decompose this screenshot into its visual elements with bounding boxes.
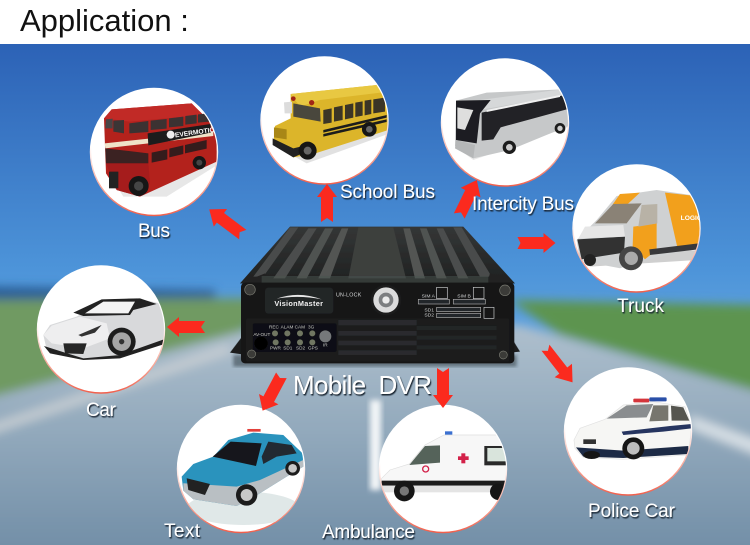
indicator panel: IR: [323, 343, 328, 348]
panel: Car: [38, 266, 167, 393]
un-lock label: UN-LOCK: [336, 293, 362, 299]
logo plate: [265, 288, 333, 314]
SIM and SD slots: [418, 287, 494, 319]
label: Police Car: Police Car: [588, 501, 676, 522]
arrow: to Police Car: [537, 341, 581, 389]
icon: blue taxi: [182, 429, 303, 525]
icon: red double-decker bus: EVERMOTION: [175, 126, 220, 139]
indicator panel: 3G: [308, 325, 315, 330]
arrow: to Text taxi: [253, 370, 291, 416]
indicator panel: PWR: [270, 345, 281, 350]
header band: [0, 0, 750, 44]
indicator panel: SD2: [296, 345, 305, 350]
lower vent panel: [246, 318, 509, 362]
icon: white ambulance van: [382, 431, 508, 501]
title: Application :: [20, 3, 189, 38]
mounting flanges: [230, 335, 250, 355]
icon: yellow school bus: [273, 85, 390, 163]
label: Bus: Bus: [138, 221, 170, 242]
label: Ambulance: Ambulance: [322, 522, 415, 543]
front face: [241, 283, 514, 363]
icon: white sports car: [43, 298, 167, 360]
indicator panel: REC: [269, 325, 279, 330]
panel: Bus: [90, 88, 220, 216]
corner screws: [245, 284, 510, 359]
SIM and SD slots: SD2: [424, 313, 434, 319]
arrow: to Truck: [518, 233, 556, 253]
panel: Ambulance: [380, 406, 508, 532]
arrow: to Bus: [203, 201, 249, 243]
arrow: to Ambulance: [433, 368, 453, 408]
logo plate: VisionMaster: [274, 299, 323, 308]
panel: Truck: [573, 165, 702, 292]
indicator panel: [253, 323, 337, 352]
icon: silver coach: [455, 89, 570, 160]
indicator panel: ALAM: [281, 325, 293, 330]
icon: orange delivery van: LOGIC: [681, 215, 702, 222]
panel: School Bus: [261, 57, 390, 184]
label: Mobile DVR: Mobile DVR: [293, 370, 432, 400]
device drop shadow: [233, 355, 517, 367]
arrow: to School Bus: [317, 184, 337, 222]
label: Truck: Truck: [617, 296, 664, 317]
indicator panel: GPS: [308, 345, 318, 350]
panel: Police Car: [564, 368, 692, 495]
arrow: to Car: [167, 317, 205, 337]
label: Text: Text: [164, 521, 201, 542]
SIM and SD slots: SIM B: [457, 294, 472, 300]
key lock: [371, 285, 401, 315]
indicator panel: SD1: [283, 345, 293, 350]
label: Car: Car: [86, 400, 117, 421]
panel: Text (taxi): [178, 406, 304, 532]
icon: white police car: [574, 397, 692, 459]
label: School Bus: School Bus: [340, 182, 435, 203]
SIM and SD slots: SIM A: [422, 294, 436, 300]
label: Intercity Bus: Intercity Bus: [472, 194, 574, 215]
indicator panel: CAM: [295, 325, 305, 330]
arrow: to Intercity Bus: [449, 175, 487, 221]
device: Mobile DVR: [230, 227, 520, 367]
panel: Intercity Bus: [442, 59, 570, 186]
SIM and SD slots: SD1: [424, 307, 434, 313]
finned top cover: [240, 227, 515, 285]
indicator panel: AV-OUT: [253, 332, 270, 337]
